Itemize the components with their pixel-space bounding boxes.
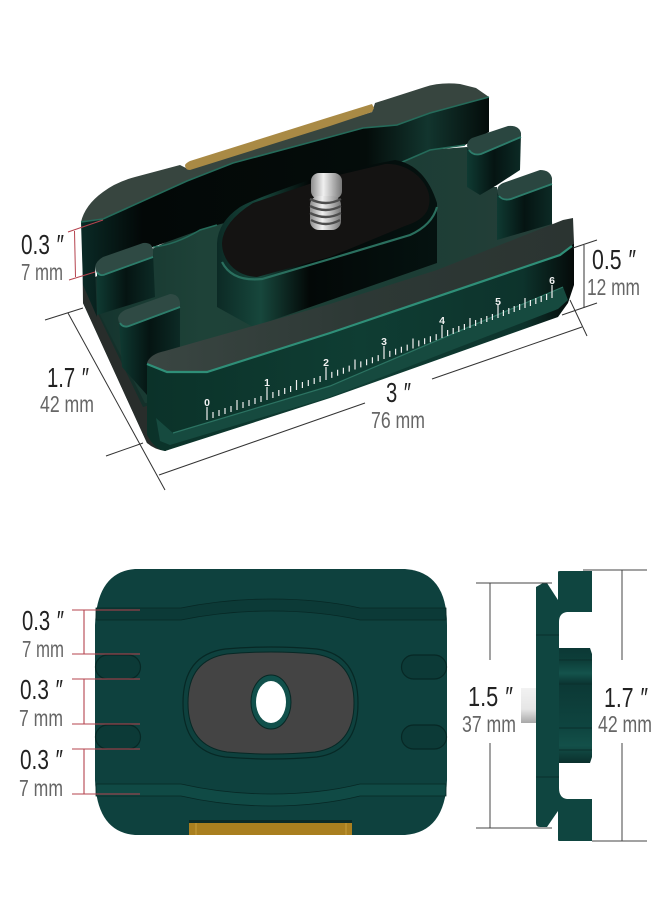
label: 0.3 in, third: 0.3 ″ <box>20 744 63 775</box>
dimension: height 0.5 in: 0.5 ″ <box>592 244 636 275</box>
dimension: side 1.7 in <box>583 570 652 841</box>
dimension: rail groove 0.3 in: 7 mm <box>21 259 63 285</box>
ruler numbers: 5 <box>495 296 501 308</box>
oval mount base <box>217 160 437 327</box>
ruler ticks <box>207 285 552 420</box>
dimension: side 1.5 in: 37 mm <box>462 711 516 737</box>
label: 0.3 in, second: 7 mm <box>19 705 63 731</box>
profile seams <box>536 635 592 777</box>
gold strip <box>185 104 374 170</box>
ruler numbers: 3 <box>381 336 387 348</box>
black rubber pad <box>222 164 430 277</box>
gold strip <box>189 820 352 824</box>
ruler numbers: 1 <box>264 377 270 389</box>
ruler numbers: 0 <box>204 397 210 409</box>
dimension: length 3 in: 3 ″ <box>386 377 411 408</box>
product photo: angled view of the quick release plate <box>81 83 574 451</box>
mounting screw <box>310 173 342 230</box>
dimension: rail groove 0.3 in <box>21 220 103 285</box>
underside and left edge <box>82 225 170 451</box>
dimension marks: bottom view spacing <box>72 610 140 794</box>
dimension: side 1.5 in <box>462 583 552 828</box>
front rail <box>147 218 574 451</box>
side profile <box>536 571 592 841</box>
dimension: side 1.5 in: 1.5 ″ <box>468 681 513 712</box>
post B <box>119 304 180 395</box>
side view of the plate <box>521 571 592 841</box>
right posts <box>467 126 552 240</box>
label: 0.3 in, first <box>22 605 64 662</box>
post C <box>467 133 521 195</box>
lower groove <box>96 784 446 806</box>
dimension: width 1.7 in <box>40 308 165 490</box>
dimension: rail groove 0.3 in: 0.3 ″ <box>21 229 64 260</box>
ruler numbers: 6 <box>549 275 555 287</box>
dimension: height 0.5 in: 12 mm <box>587 274 640 300</box>
dimension: length 3 in <box>159 300 587 475</box>
screw hole <box>251 675 291 729</box>
dimension: height 0.5 in <box>562 240 640 315</box>
dimension: length 3 in: 76 mm <box>371 407 425 433</box>
dark backing of the plate <box>83 147 560 451</box>
floor of the channel <box>85 147 552 403</box>
slots <box>96 655 446 749</box>
label: 0.3 in, second <box>19 674 63 731</box>
dimension: width 1.7 in: 1.7 ″ <box>47 362 89 393</box>
rail lower chamfer <box>156 287 568 445</box>
back wall face <box>81 97 489 317</box>
rubber pad <box>188 652 354 754</box>
label: 0.3 in, first: 0.3 ″ <box>22 605 64 636</box>
hub <box>558 648 592 763</box>
post A <box>97 253 155 315</box>
label: 0.3 in, second: 0.3 ″ <box>20 674 63 705</box>
rail front face <box>147 243 574 451</box>
rail highlight <box>147 246 572 372</box>
ruler numbers: 2 <box>323 357 329 369</box>
upper groove <box>96 599 446 620</box>
back wall top surface <box>81 83 489 222</box>
ruler numbers <box>204 275 555 409</box>
rail top surface <box>147 218 574 372</box>
dimension: side 1.7 in: 1.7 ″ <box>604 682 648 713</box>
ruler numbers: 4 <box>439 315 445 327</box>
back wall highlights <box>81 97 489 247</box>
protruding pin <box>521 688 537 723</box>
left posts <box>95 243 180 395</box>
label: 0.3 in, third: 7 mm <box>19 775 63 801</box>
post D <box>497 178 552 240</box>
label: 0.3 in, third <box>19 744 63 801</box>
oval recess <box>183 647 358 759</box>
label: 0.3 in, first: 7 mm <box>22 636 64 662</box>
plate body <box>95 569 447 835</box>
dimension: width 1.7 in: 42 mm <box>40 391 94 417</box>
bottom view of the plate <box>95 569 447 835</box>
